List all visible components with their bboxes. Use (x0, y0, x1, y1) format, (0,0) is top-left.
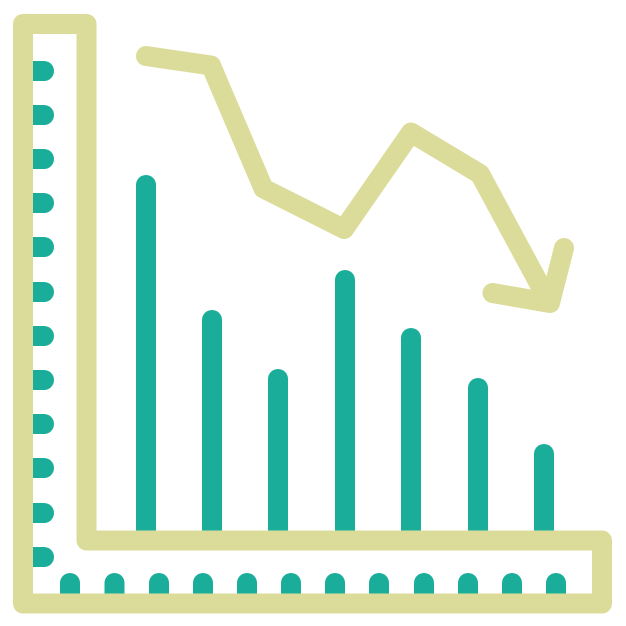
trend line arrow (146, 56, 564, 303)
bar chart (146, 185, 544, 535)
ruler ticks: horizontal axis (60, 573, 566, 595)
ruler ticks: vertical axis (32, 61, 54, 567)
